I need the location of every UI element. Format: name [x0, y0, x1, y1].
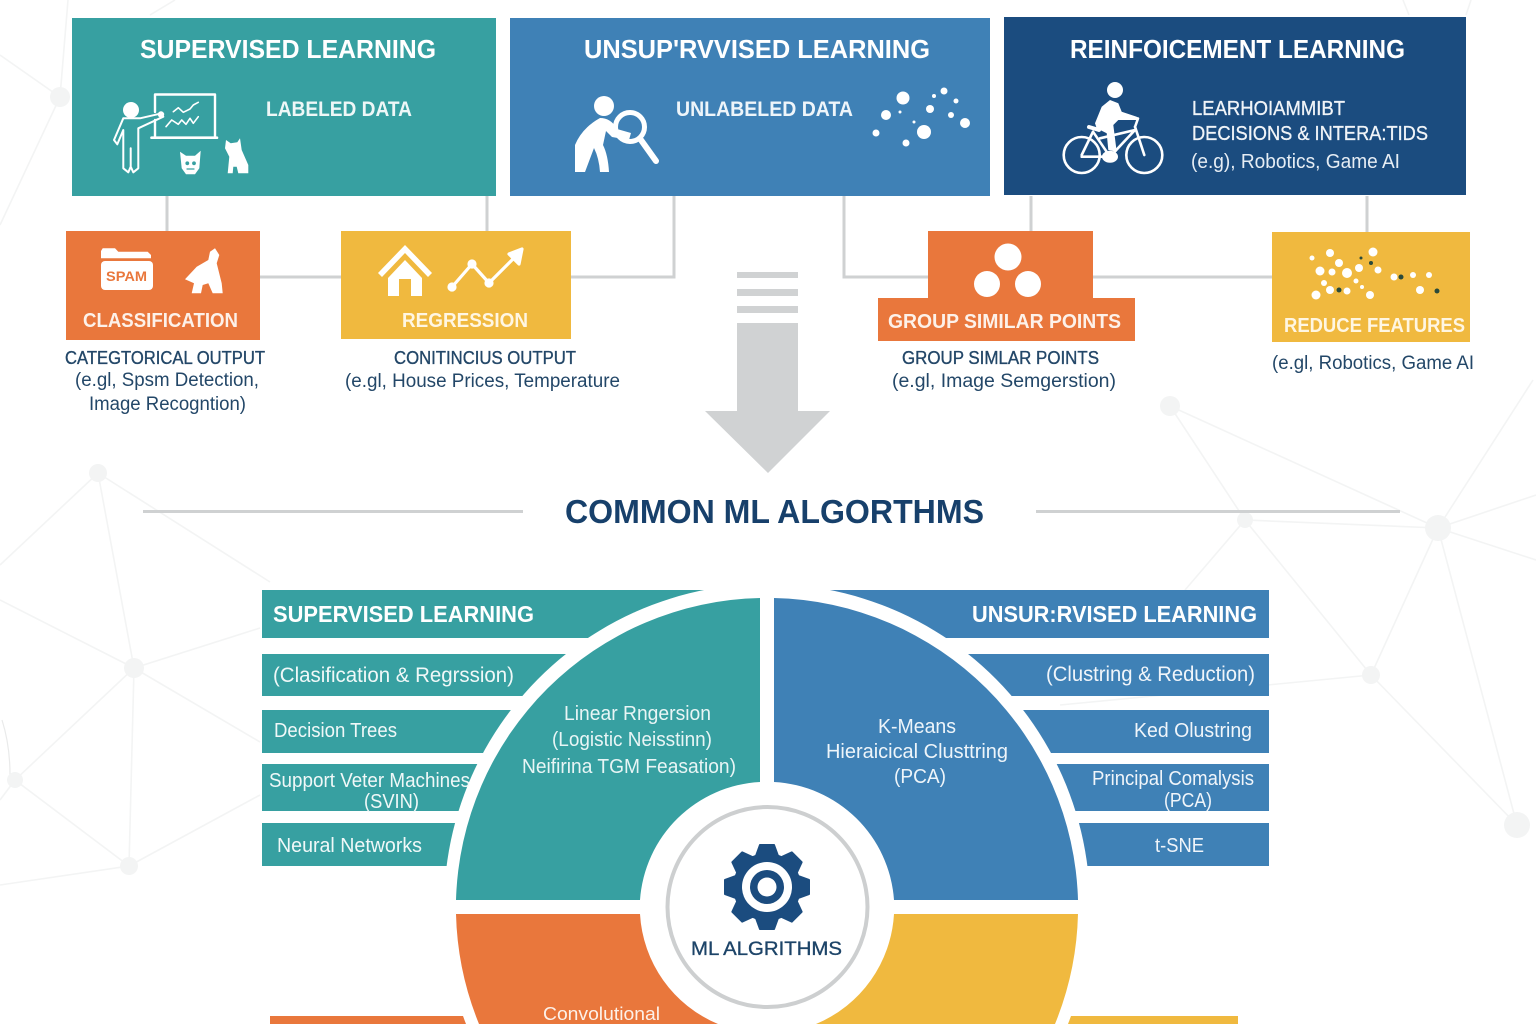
text: clustering description: (e.gl, Image Semgerstion)	[892, 371, 1116, 392]
connector lines	[167, 196, 1367, 277]
label: group similar points: GROUP SIMILAR POINTS	[888, 311, 1121, 333]
label: ml algorithms: ML ALGRITHMS	[691, 939, 842, 960]
label: classification: CLASSIFICATION	[83, 310, 238, 332]
panel: unsupervised learning	[510, 18, 990, 196]
panel: supervised learning	[72, 18, 496, 196]
text: unsupervised list labels: (PCA)	[1164, 790, 1212, 812]
text: reduce features description: (e.gl, Robotics, Game AI	[1272, 353, 1474, 374]
heading: unsupervised learning: UNSUP'RVVISED LEARNING	[584, 34, 930, 64]
donut gap	[444, 584, 1090, 1024]
text: unsupervised list labels: Principal Comalysis	[1092, 768, 1254, 790]
text: classification description	[65, 348, 265, 415]
text: supervised sector: (Logistic Neisstinn)	[552, 729, 712, 751]
label: unlabeled data: UNLABELED DATA	[676, 98, 853, 121]
center hub	[668, 807, 868, 1007]
text: classification description: CATEGTORICAL OUTPUT	[65, 348, 265, 368]
heading: reinforcement learning: REINFOICEMENT LEARNING	[1070, 34, 1405, 64]
panel: regression	[341, 231, 571, 339]
text: supervised list labels: SUPERVISED LEARNING	[273, 601, 534, 627]
label: labeled data: LABELED DATA	[266, 98, 412, 121]
icon: house	[378, 245, 432, 296]
text: clustering description: GROUP SIMLAR POINTS	[902, 348, 1099, 368]
text: unsupervised list labels: t-SNE	[1155, 835, 1204, 857]
chart: four-sector algorithm wheel	[456, 598, 1078, 1024]
text: supervised sector: Neifirina TGM Feasation)	[522, 756, 736, 778]
text: regression description: (e.gl, House Prices, Temperature	[345, 371, 620, 392]
bars: lower legend headers	[270, 1016, 1238, 1024]
text: reinforcement description	[1191, 98, 1428, 173]
heading: supervised learning: SUPERVISED LEARNING	[140, 34, 436, 64]
text: supervised sector: Linear Rngersion	[564, 703, 711, 725]
text: unsupervised list labels: UNSUR:RVISED LEARNING	[972, 601, 1257, 627]
icon: gear	[725, 845, 809, 929]
title: common ml algorithms: COMMON ML ALGORTHMS	[565, 493, 984, 530]
icon: teacher at board with cat and dog	[114, 94, 248, 174]
icon: spam folder	[101, 248, 153, 290]
label: reduce features: REDUCE FEATURES	[1284, 315, 1465, 337]
label: regression: REGRESSION	[402, 310, 528, 332]
text: reinforcement description: DECISIONS & INTERA:TIDS	[1192, 123, 1428, 145]
arrow: down to algorithms	[705, 272, 830, 473]
text: unsupervised sector: (PCA)	[894, 766, 946, 788]
text: regression description	[345, 348, 620, 392]
text: classification description: (e.gl, Spsm Detection,	[75, 370, 259, 391]
text: reinforcement description: (e.g), Robotics, Game AI	[1191, 151, 1400, 173]
text: supervised list labels	[269, 601, 534, 857]
text: unsupervised sector: Hieraicical Clusttring	[826, 741, 1008, 763]
sector: supervised	[456, 598, 760, 900]
sector: unsupervised	[774, 598, 1078, 900]
sector: deep learning	[456, 914, 718, 1024]
icon: person with magnifying glass	[575, 96, 656, 172]
panel: reinforcement learning	[1004, 17, 1466, 195]
icon: rising trend arrow	[449, 249, 522, 290]
icon: three clustered circles	[974, 244, 1041, 297]
text: unsupervised list labels	[972, 601, 1257, 857]
text: supervised list labels: Decision Trees	[274, 720, 397, 742]
text: unsupervised list labels: Ked Olustring	[1134, 720, 1252, 742]
text: unsupervised list labels: (Clustring & Reduction)	[1046, 663, 1255, 686]
panel: group similar points	[878, 231, 1135, 341]
icon: spam folder: SPAM	[106, 268, 147, 284]
text: supervised sector	[522, 703, 736, 778]
text: supervised list labels: (SVIN)	[364, 791, 419, 813]
icon: scattered data points	[872, 88, 970, 146]
sector: reinforcement	[816, 914, 1078, 1024]
icon: dog silhouette	[185, 248, 223, 293]
icon: reduced dot cloud	[1310, 248, 1440, 300]
bars: supervised algorithm list	[262, 590, 722, 866]
text: reinforcement description: LEARHOIAMMIBT	[1192, 98, 1345, 120]
text: unsupervised sector	[826, 716, 1008, 788]
text: deep learning sector: Convolutional	[543, 1003, 660, 1024]
panel: classification	[66, 231, 260, 340]
text: supervised list labels: Support Veter Machines	[269, 770, 470, 792]
text: clustering description	[892, 348, 1116, 392]
text: classification description: Image Recogntion)	[89, 394, 246, 415]
text: supervised list labels: Neural Networks	[277, 835, 422, 857]
bars: unsupervised algorithm list	[810, 590, 1269, 866]
text: supervised list labels: (Clasification & Regrssion)	[273, 664, 514, 687]
text: regression description: CONITINCIUS OUTPUT	[394, 348, 576, 368]
icon: person riding bicycle	[1064, 82, 1162, 173]
panel: reduce features	[1272, 232, 1470, 342]
text: unsupervised sector: K-Means	[878, 716, 956, 738]
